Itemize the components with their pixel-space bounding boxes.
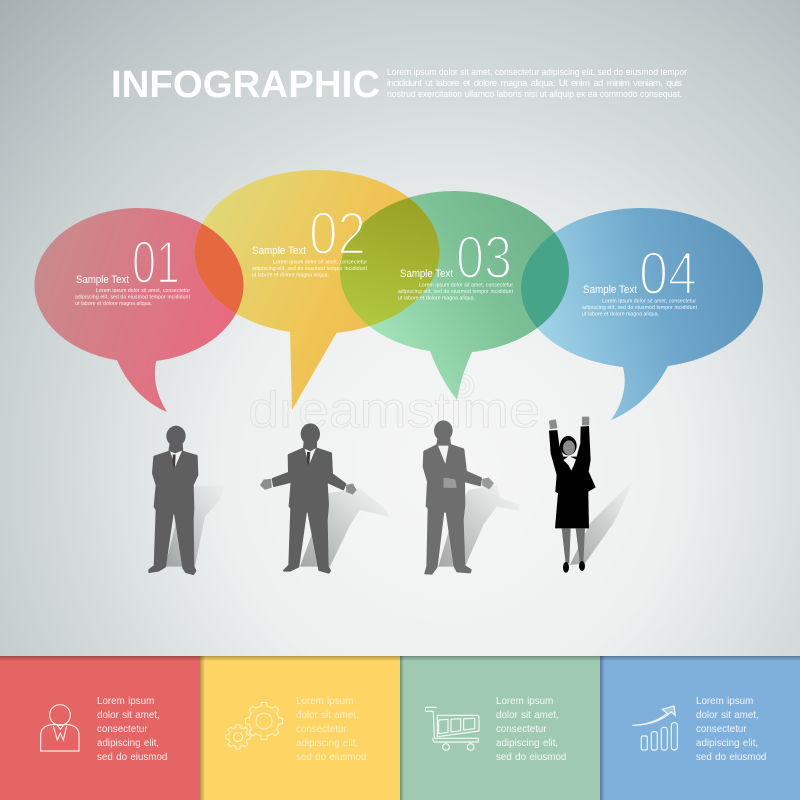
blouse — [563, 456, 576, 471]
shoes — [563, 562, 569, 573]
legs — [562, 528, 585, 563]
figure: businessman 3 — [424, 420, 519, 574]
bubble 4 text: 04 — [639, 240, 697, 307]
panel text: sed do eiusmod — [696, 752, 766, 763]
bubble 1 text: Sample Text — [76, 274, 129, 286]
panel: yellow — [200, 656, 400, 800]
icon: growth chart — [632, 706, 677, 750]
watermark: dreamstime — [248, 382, 540, 438]
shirt — [438, 446, 449, 464]
panel text — [97, 696, 167, 763]
bubble 4 text: adipiscing elit, sed do eiusmod tempor incididunt — [582, 305, 698, 311]
hair — [560, 436, 577, 455]
suit silhouette — [149, 443, 197, 574]
panel text — [296, 696, 366, 763]
bubble 4 text: ut labore et dolore magna aliqua. — [582, 312, 659, 318]
speech bubble 1 — [34, 208, 244, 412]
bubble 2 text: 02 — [309, 200, 366, 267]
figure: businessman 1 — [149, 426, 225, 574]
hands and cuff — [444, 478, 493, 489]
panel text: Lorem ipsum — [296, 696, 353, 707]
panel text: adipiscing elit, — [296, 738, 358, 749]
figure: businessman 2 — [261, 423, 388, 573]
panel text: adipiscing elit, — [496, 738, 558, 749]
bubble 2 text — [252, 213, 367, 278]
intro text block — [387, 67, 687, 100]
overlap: bubbles 3 and 4 — [521, 232, 569, 328]
head — [166, 426, 186, 446]
hands — [261, 479, 356, 494]
panel text: Lorem ipsum — [696, 696, 753, 707]
bubble 4 text: Sample Text — [583, 284, 637, 296]
panel text: consectetur — [296, 724, 347, 735]
shirt and tie — [170, 451, 182, 467]
icon: gears — [226, 702, 282, 749]
bubble 4 text: Lorem ipsum dolor sit amet, consectetur — [602, 298, 696, 304]
panel text: consectetur — [496, 724, 547, 735]
panel text: dolor sit amet, — [696, 710, 759, 721]
bubble 3 text: Lorem ipsum dolor sit amet, consectetur — [419, 282, 513, 288]
speech bubble 3 — [340, 191, 569, 400]
speech bubble 4 — [521, 208, 763, 420]
jacket and skirt — [549, 426, 596, 528]
cast shadow — [300, 488, 388, 567]
overlap: bubbles 2 and 3 — [340, 198, 440, 326]
bubble 1 text: ut labore et dolore magna aliqua. — [75, 301, 152, 307]
suit silhouette — [424, 438, 481, 574]
panel: green — [400, 656, 600, 800]
figure: businesswoman — [549, 417, 633, 573]
icon: shopping cart — [425, 707, 479, 750]
panel text: dolor sit amet, — [296, 710, 359, 721]
shirt and tie — [305, 448, 316, 465]
head — [301, 423, 320, 445]
intro text block: Lorem ipsum dolor sit amet, consectetur adipiscing elit, sed do eiusmod tempor — [387, 67, 687, 78]
panel text: sed do eiusmod — [496, 752, 566, 763]
bubble 1 text: adipiscing elit, sed do eiusmod tempor incididunt — [75, 294, 191, 300]
bubble 1 text: 01 — [132, 229, 180, 296]
head — [434, 420, 453, 441]
icon: person — [41, 705, 79, 751]
bubble 3 text: 03 — [456, 224, 512, 291]
panel: red — [0, 656, 200, 800]
panel text: consectetur — [696, 724, 747, 735]
bubble 1 text: Lorem ipsum dolor sit amet, consectetur — [96, 288, 190, 294]
suit silhouette — [273, 442, 345, 573]
intro text block: nostrud exercitation ullamco laboris nisi ut aliquip ex ea commodo consequat. — [387, 89, 682, 100]
panel text — [696, 696, 766, 763]
bubble 3 text: adipiscing elit, sed do eiusmod tempor incididunt — [398, 289, 514, 295]
panel text: sed do eiusmod — [296, 752, 366, 763]
panel text: adipiscing elit, — [97, 738, 159, 749]
face — [563, 440, 575, 455]
bubble 4 text — [582, 240, 698, 318]
cast shadow — [438, 485, 519, 567]
bubble 3 text — [398, 224, 514, 302]
bubble 2 text: adipiscing elit, sed do eiusmod tempor incididunt — [252, 266, 368, 272]
bubble 2 text: Sample Text — [252, 245, 306, 257]
panel text: adipiscing elit, — [696, 738, 758, 749]
cast shadow — [570, 480, 633, 565]
panel text: consectetur — [97, 724, 148, 735]
overlap: bubbles 1 and 2 — [194, 224, 244, 314]
panel text: sed do eiusmod — [97, 752, 167, 763]
intro text block: incididunt ut labore et dolore magna aliqua. Ut enim ad minim veniam, quis — [387, 78, 682, 89]
bubble 3 text: ut labore et dolore magna aliqua. — [398, 296, 475, 302]
title: INFOGRAPHIC — [111, 64, 380, 106]
bubble 2 text: 02 — [309, 200, 366, 267]
panel text: dolor sit amet, — [496, 710, 559, 721]
bubble 2 text: ut labore et dolore magna aliqua. — [252, 272, 329, 278]
panel text: dolor sit amet, — [97, 710, 160, 721]
hands — [550, 417, 589, 428]
speech bubble 2 — [194, 170, 440, 410]
panel text — [496, 696, 566, 763]
panel: blue — [600, 656, 800, 800]
bubble 2 text: Lorem ipsum dolor sit amet, consectetur — [273, 260, 367, 266]
panel text: Lorem ipsum — [496, 696, 553, 707]
bubble 1 text — [75, 229, 191, 307]
bubble 3 text: Sample Text — [400, 268, 453, 280]
panel text: Lorem ipsum — [97, 696, 154, 707]
cast shadow — [165, 485, 225, 567]
